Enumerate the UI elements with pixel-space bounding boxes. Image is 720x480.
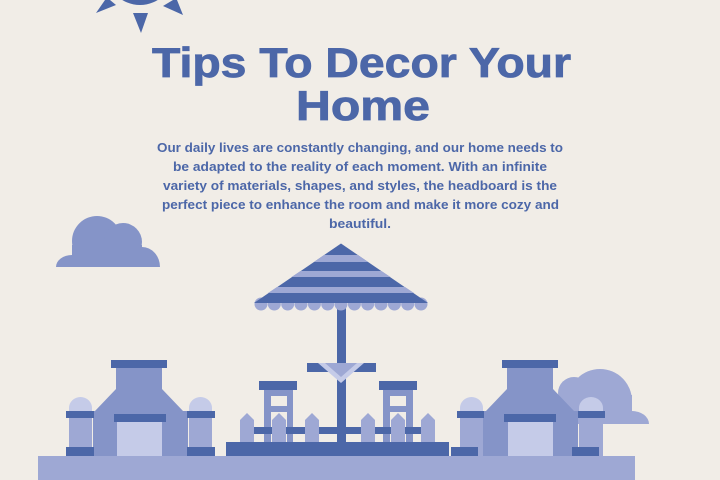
house: right <box>451 360 605 456</box>
stool: right <box>379 381 417 442</box>
cloud: right <box>558 369 649 424</box>
umbrella canopy <box>254 244 428 303</box>
house: left <box>66 360 215 456</box>
patio set: umbrella, table, stools, fence <box>226 244 449 456</box>
intro paragraph: variety of materials, shapes, and styles, the headboard is the <box>163 178 557 193</box>
intro paragraph: be adapted to the reality of each moment. With an infinite <box>173 159 547 174</box>
intro paragraph: beautiful. <box>329 216 391 231</box>
umbrella pole <box>337 303 346 443</box>
intro paragraph: perfect piece to enhance the room and make it more cozy and <box>162 197 559 212</box>
base platform <box>226 442 449 456</box>
icon: sun <box>96 0 183 33</box>
fence pickets <box>240 413 435 442</box>
fence rail <box>254 427 421 434</box>
table top <box>307 363 376 372</box>
title: Home <box>296 82 430 129</box>
title: Tips To Decor Your <box>152 39 571 86</box>
intro paragraph <box>157 140 563 231</box>
ground <box>38 456 635 480</box>
stool: left <box>259 381 297 442</box>
umbrella scallops <box>254 298 428 310</box>
intro paragraph: Our daily lives are constantly changing, and our home needs to <box>157 140 563 155</box>
cloud: left <box>56 216 160 267</box>
napkin <box>318 363 364 383</box>
title <box>152 39 571 129</box>
